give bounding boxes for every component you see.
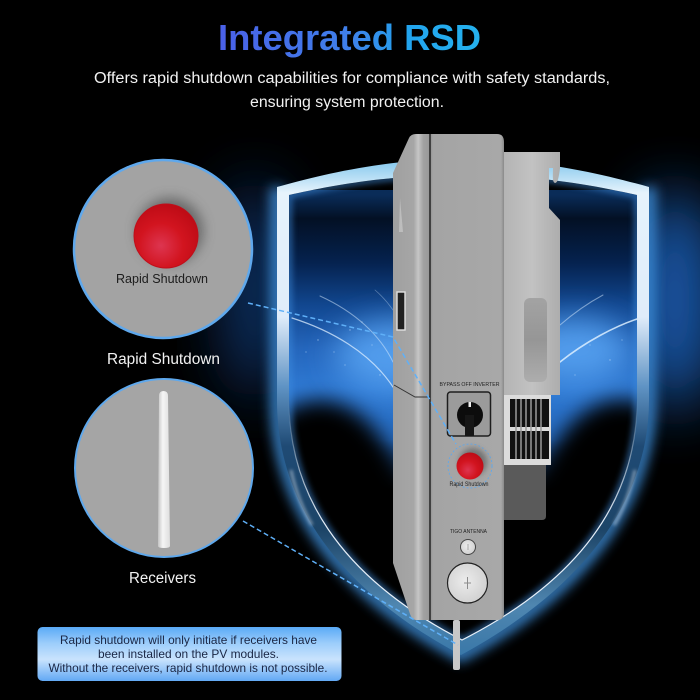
- subtitle: [94, 70, 610, 111]
- subtitle: ensuring system protection.: [250, 94, 444, 111]
- circle: rapid shutdown detail: Rapid Shutdown: [116, 272, 208, 286]
- USB port: [397, 292, 405, 330]
- side vent logo: [399, 198, 403, 232]
- small antenna connector: [460, 540, 476, 554]
- antenna label: TIGO ANTENNA: [450, 529, 487, 535]
- label: receivers: Receivers: [129, 570, 196, 587]
- red shutdown button: Rapid Shutdown: [450, 482, 488, 488]
- shield: [277, 162, 649, 655]
- side panel: [393, 134, 430, 620]
- callout note: been installed on the PV modules.: [98, 647, 279, 661]
- light arcs: [292, 290, 640, 387]
- callout lines: [243, 303, 458, 645]
- bracket slot: [524, 298, 547, 382]
- rotary switch: [448, 392, 490, 436]
- front panel: [430, 134, 504, 620]
- label: rapid shutdown: Rapid Shutdown: [107, 351, 220, 368]
- blue glow behind shield: [225, 180, 700, 655]
- callout note: Without the receivers, rapid shutdown is not possible.: [48, 661, 328, 675]
- heat sink vents: [504, 395, 551, 465]
- circle: receivers detail: [75, 379, 253, 557]
- mounting bracket: [504, 152, 560, 395]
- large round cap: [448, 563, 488, 603]
- stars: [305, 321, 623, 376]
- inverter: [393, 134, 560, 670]
- shield inner highlight: [289, 400, 637, 640]
- shield sheen: [291, 470, 635, 525]
- red shutdown button: [448, 444, 492, 488]
- title: Integrated RSD: [218, 17, 481, 58]
- antenna closeup: [158, 391, 170, 548]
- shield interior: [289, 178, 637, 640]
- switch label: BYPASS OFF INVERTER: [440, 382, 500, 388]
- circle: rapid shutdown detail: [74, 160, 252, 338]
- subtitle: Offers rapid shutdown capabilities for compliance with safety standards,: [94, 70, 610, 87]
- callout note: [38, 627, 342, 681]
- shield border: [277, 158, 649, 655]
- gray rear block: [504, 465, 546, 520]
- antenna rod: [453, 620, 460, 670]
- inner border glow: [289, 174, 637, 640]
- red button closeup: [134, 204, 198, 268]
- side seam: [394, 385, 430, 397]
- panel edge line: [429, 134, 431, 620]
- callout note: Rapid shutdown will only initiate if receivers have: [60, 633, 317, 647]
